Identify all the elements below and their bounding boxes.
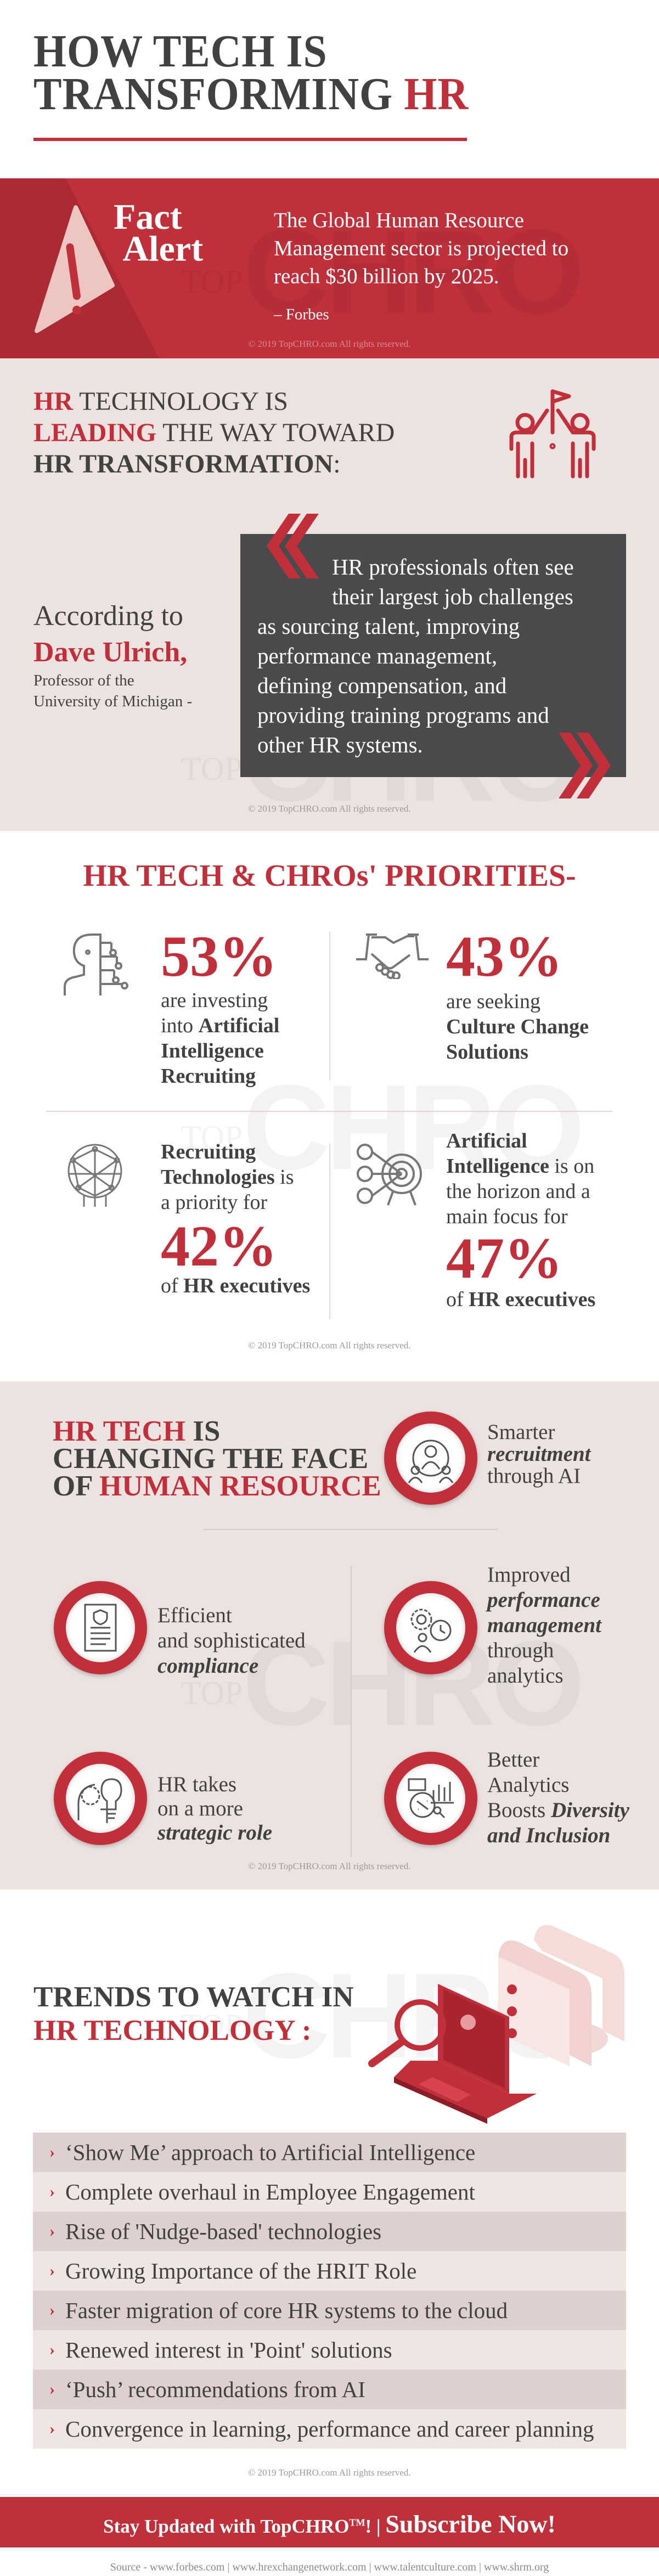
text (446, 1129, 594, 1228)
list: trends: Rise of 'Nudge-based' technologies (65, 2219, 381, 2244)
heading: TRENDS TO WATCH IN (33, 1981, 354, 2013)
heading: fact alert: Alert (123, 229, 203, 269)
panel: leading the way: Professor of the (33, 672, 134, 689)
panel: fact alert: TOPCHRO (181, 204, 581, 339)
text: are investing (161, 989, 268, 1012)
list: trends: › (49, 2262, 55, 2280)
panel: changing the face (0, 1381, 659, 1889)
panel: priorities: © 2019 TopCHRO.com All rights reserved. (248, 1340, 411, 1351)
quote box: defining compensation, and (257, 673, 506, 698)
icon: open quote (267, 514, 319, 578)
text: Intelligence (161, 1039, 264, 1062)
text (161, 1140, 294, 1214)
footer: subscribe banner (0, 2497, 659, 2547)
list: trends: ‘Push’ recommendations from AI (65, 2377, 365, 2402)
item: compliance (52, 1581, 306, 1678)
text (446, 990, 589, 1064)
stat: 42% (68, 1140, 310, 1297)
heading: fact alert (114, 197, 203, 269)
item: performance management (382, 1563, 602, 1688)
icon: network brain (68, 1144, 122, 1207)
heading: HR TECH IS (53, 1415, 220, 1447)
text: Solutions (446, 1040, 528, 1064)
list: trends: › (49, 2301, 55, 2319)
text: into Artificial (161, 1014, 279, 1037)
title: HOW TECH IS (33, 26, 328, 77)
item: smarter recruitment: through AI (487, 1464, 581, 1488)
text: according to: According to (33, 600, 183, 632)
list: trends: ‘Show Me’ approach to Artificial Intelligence (65, 2140, 475, 2165)
heading: HR TECH & CHROs' PRIORITIES- (83, 859, 576, 893)
text: Artificial (446, 1129, 527, 1152)
icon: handshake (356, 933, 429, 979)
quote box: HR professionals often see (332, 554, 574, 580)
item: compliance: compliance (157, 1654, 258, 1678)
panel: priorities: TOPCHRO (181, 1060, 581, 1195)
panel: trends: © 2019 TopCHRO.com All rights reserved. (248, 2467, 411, 2478)
quote box (240, 534, 626, 777)
quote box: providing training programs and (257, 702, 549, 728)
footer: subscribe banner: Stay Updated with TopCHROTM! | Subscribe Now! (103, 2510, 556, 2538)
quote box: as sourcing talent, improving (257, 614, 520, 639)
text: are seeking (446, 990, 540, 1013)
text: Technologies is (161, 1166, 294, 1189)
item: performance management: through (487, 1639, 554, 1662)
number: 53% (161, 924, 277, 988)
panel: priorities (46, 859, 612, 1351)
heading (53, 1415, 381, 1502)
item: performance management: Improved (487, 1563, 571, 1587)
item: diversity and inclusion: and Inclusion (487, 1824, 610, 1847)
icon: ai head (64, 933, 128, 995)
text: main focus for (446, 1205, 568, 1228)
number: 42% (161, 1214, 277, 1278)
heading (33, 387, 395, 479)
text: the horizon and a (446, 1180, 590, 1203)
quote box: their largest job challenges (332, 584, 573, 609)
stat: 53% (64, 924, 279, 1088)
heading: HR TRANSFORMATION: (33, 449, 341, 479)
item: smarter recruitment (382, 1411, 592, 1509)
heading: HR TECHNOLOGY IS (33, 387, 288, 416)
item: diversity and inclusion (382, 1748, 630, 1849)
stat: 47%: of HR executives (446, 1288, 595, 1311)
panel: trends: TOPCHRO (181, 1948, 581, 2083)
item: smarter recruitment: Smarter (487, 1420, 555, 1444)
item: diversity and inclusion: Boosts Diversity (487, 1798, 629, 1822)
panel: trends (33, 1925, 626, 2478)
text: Recruiting (161, 1140, 256, 1163)
icon: warning triangle (35, 205, 115, 333)
item: diversity and inclusion: Better (487, 1748, 539, 1771)
panel: leading the way: © 2019 TopCHRO.com All rights reserved. (248, 803, 411, 814)
text: Recruiting (161, 1065, 256, 1088)
panel: leading the way (0, 358, 659, 831)
panel: leading the way: University of Michigan - (33, 693, 192, 710)
footer: sources: Source - www.forbes.com | www.hrexchangenetwork.com | www.talentculture.com | www.shrm.org (110, 2561, 549, 2573)
illustration: laptop and resumes (368, 1925, 624, 2124)
panel: leading the way: TOPCHRO (181, 691, 581, 826)
list: trends: › (49, 2222, 55, 2240)
quote box: other HR systems. (257, 732, 423, 757)
list: trends: Renewed interest in 'Point' solutions (65, 2337, 392, 2363)
stat: 43% (356, 924, 589, 1064)
panel: changing the face: © 2019 TopCHRO.com All rights reserved. (248, 1861, 411, 1871)
text: according to (33, 600, 187, 668)
heading: HR TECHNOLOGY : (33, 2015, 312, 2046)
icon: target people (357, 1144, 422, 1206)
item: diversity and inclusion: Analytics (487, 1773, 569, 1797)
list: trends: › (49, 2420, 55, 2438)
stat: 42%: of HR executives (161, 1274, 310, 1297)
item: strategic role: HR takes (157, 1773, 236, 1796)
number: 43% (446, 924, 562, 988)
list: trends: › (49, 2183, 55, 2201)
item: performance management: analytics (487, 1664, 564, 1688)
text: fact: reach $30 billion by 2025. (274, 265, 499, 288)
item: compliance: and sophisticated (157, 1629, 306, 1652)
list: trends: Convergence in learning, performance and career planning (65, 2416, 594, 2442)
stat: 47% (357, 1129, 595, 1311)
heading: OF HUMAN RESOURCE (53, 1470, 381, 1502)
heading: CHANGING THE FACE (53, 1443, 368, 1475)
title (33, 26, 469, 120)
panel: fact alert (0, 178, 659, 358)
list: trends: › (49, 2143, 55, 2161)
text: fact: Management sector is projected to (274, 237, 568, 260)
number: 47% (446, 1226, 562, 1290)
text: Intelligence is on (446, 1155, 594, 1178)
item: strategic role (52, 1751, 272, 1849)
list: trends (33, 2133, 626, 2449)
item: performance management: performance (487, 1588, 600, 1612)
item: compliance: Efficient (157, 1604, 232, 1627)
text: according to: Dave Ulrich, (33, 637, 187, 668)
panel: fact alert: © 2019 TopCHRO.com All rights reserved. (248, 339, 411, 349)
quote box: performance management, (257, 643, 497, 668)
title: TRANSFORMING HR (33, 69, 469, 120)
item: smarter recruitment: recruitment (487, 1442, 591, 1466)
panel: changing the face: TOPCHRO (181, 1616, 581, 1751)
text: Culture Change (446, 1015, 589, 1038)
heading: LEADING THE WAY TOWARD (33, 418, 395, 447)
icon: close quote (559, 733, 611, 798)
item: strategic role: on a more (157, 1797, 243, 1820)
list: trends: › (49, 2341, 55, 2359)
item: strategic role: strategic role (157, 1821, 272, 1844)
list: trends: Growing Importance of the HRIT Role (65, 2258, 416, 2283)
text: a priority for (161, 1191, 267, 1214)
text: fact: The Global Human Resource (274, 209, 524, 232)
panel: fact alert: – Forbes (274, 306, 329, 323)
list: trends: Faster migration of core HR systems to the cloud (65, 2298, 508, 2323)
list: trends: Complete overhaul in Employee Engagement (65, 2179, 475, 2204)
list: trends: › (49, 2380, 55, 2398)
icon: team with flag (509, 390, 596, 479)
heading (33, 1981, 354, 2046)
text: fact (274, 209, 568, 288)
text (161, 989, 279, 1088)
item: performance management: management (487, 1613, 601, 1637)
heading: fact alert: Fact (114, 197, 182, 237)
